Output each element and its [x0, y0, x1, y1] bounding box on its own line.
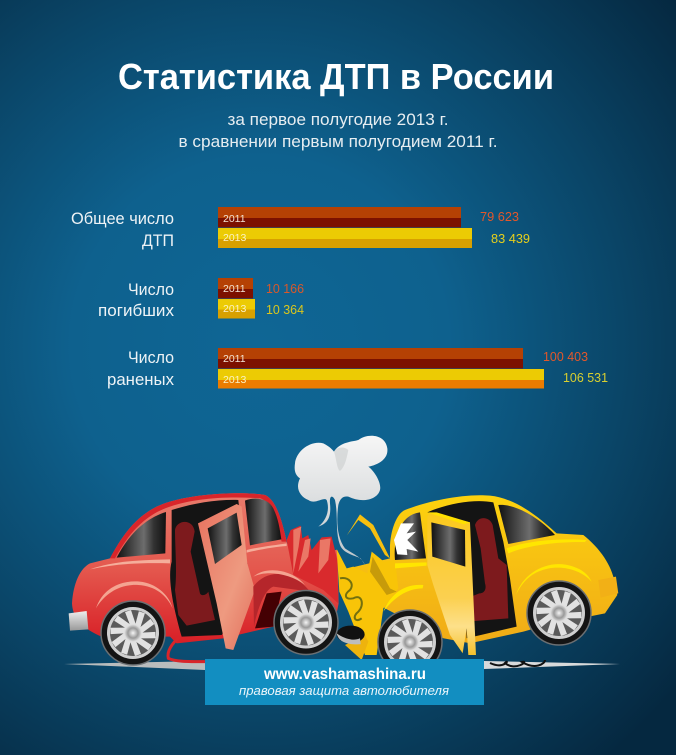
label: fatalities: погибших	[98, 301, 174, 320]
rear bumper	[69, 611, 88, 631]
front window	[245, 499, 281, 545]
value 2011: 100 403	[543, 349, 588, 364]
skid scribble	[490, 660, 545, 666]
label: total accidents: ДТП	[142, 231, 174, 250]
value 2013: 83 439	[491, 231, 530, 246]
title: Статистика ДТП в России	[118, 56, 554, 97]
label: injured	[107, 348, 174, 389]
open door	[198, 504, 255, 650]
banner	[205, 659, 484, 705]
wheel: red rear	[101, 601, 165, 665]
body highlights	[90, 543, 287, 569]
group: injured	[107, 348, 608, 389]
bar 2011	[218, 348, 523, 368]
value 2011: 10 166	[266, 281, 304, 296]
crumpled hood	[287, 526, 338, 603]
wheel: yellow rear	[527, 581, 591, 645]
bar 2011: 2011	[223, 283, 246, 295]
label: injured: Число	[128, 348, 174, 367]
icon: red car	[69, 493, 339, 662]
open door	[427, 512, 476, 655]
subtitle: за первое полугодие 2013 г.	[228, 111, 448, 129]
icon: smoke cloud	[295, 436, 387, 565]
broken glass	[394, 523, 418, 555]
wheel: red front	[274, 590, 338, 654]
icon: yellow car	[337, 495, 618, 660]
bar 2013	[218, 369, 544, 388]
door window	[431, 522, 465, 567]
value 2011: 79 623	[480, 209, 519, 224]
car body	[348, 495, 617, 643]
radiator spring	[340, 578, 362, 620]
value 2013: 10 364	[266, 302, 304, 317]
label: fatalities	[98, 280, 174, 320]
crumpled hood	[337, 549, 398, 655]
seat	[467, 518, 508, 622]
bar 2011: 2011	[223, 213, 246, 225]
subtitle	[178, 111, 498, 151]
bar 2013	[218, 299, 255, 318]
group: fatalities	[98, 278, 304, 320]
label: total accidents: Общее число	[71, 209, 174, 228]
broken strut	[345, 635, 368, 660]
door opening	[170, 500, 253, 637]
seat	[175, 522, 215, 626]
bar 2011	[218, 278, 253, 298]
bar 2013: 2013	[223, 374, 247, 386]
bar 2013: 2013	[223, 303, 247, 315]
label: total accidents	[71, 209, 174, 250]
group: total accidents	[71, 207, 530, 250]
bar 2011	[218, 207, 461, 228]
label: injured: раненых	[107, 370, 174, 389]
bar chart	[71, 207, 608, 389]
bar 2013	[218, 228, 472, 248]
bar 2013: 2013	[223, 232, 247, 244]
banner tagline: правовая защита автолюбителя	[239, 683, 449, 698]
door window	[208, 513, 242, 564]
rear window	[117, 512, 166, 558]
banner url: www.vashamashina.ru	[263, 666, 426, 683]
wheel: yellow front	[378, 610, 442, 674]
road shadow	[64, 661, 620, 670]
front window	[395, 512, 426, 560]
value 2013: 106 531	[563, 370, 608, 385]
fallen wheel disc	[337, 626, 365, 644]
rear light	[598, 577, 618, 598]
subtitle: в сравнении первым полугодием 2011 г.	[178, 133, 498, 151]
label: fatalities: Число	[128, 280, 174, 299]
roof rim	[110, 493, 287, 558]
front wheel arch	[253, 574, 310, 627]
rear window	[498, 505, 555, 544]
car body	[72, 493, 339, 643]
body highlights	[395, 539, 587, 568]
hanging bumper strip	[168, 637, 207, 662]
door opening	[427, 501, 517, 638]
wheels	[101, 581, 591, 674]
bar 2011: 2011	[223, 353, 246, 365]
